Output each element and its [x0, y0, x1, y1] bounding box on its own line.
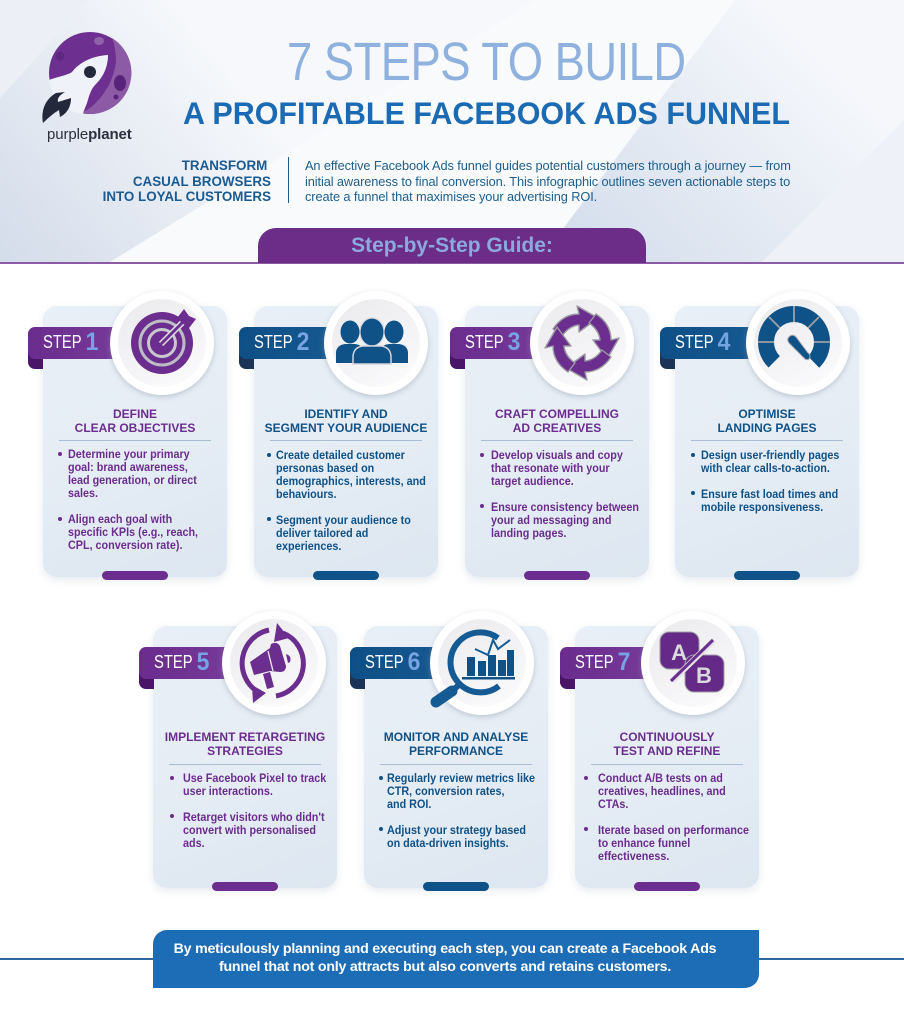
- step ribbon: [350, 647, 432, 689]
- panel: step 1: [28, 290, 228, 582]
- heading: IMPLEMENT RETARGETING STRATEGIES: [165, 730, 325, 758]
- heading: CONTINUOUSLY TEST AND REFINE: [614, 730, 720, 758]
- bullets: Use Facebook Pixel to track user interactions. Retarget visitors who didn't convert with personalised ads.: [183, 772, 326, 850]
- section tab: step-by-step guide: [258, 228, 646, 263]
- icon: planet and rocket: [42, 32, 132, 123]
- step ribbon: STEP: [43, 332, 81, 352]
- icon: cycle arrows: [528, 290, 636, 399]
- header background: [0, 0, 904, 262]
- panel: step 5: [139, 610, 338, 892]
- heading: IDENTIFY AND SEGMENT YOUR AUDIENCE: [265, 407, 427, 434]
- card body: [153, 626, 337, 888]
- bullets: Regularly review metrics like CTR, conversion rates, and ROI. Adjust your strategy based on data-driven insights.: [387, 772, 535, 850]
- title line 1: 7 STEPS TO BUILD: [287, 32, 686, 92]
- heading: OPTIMISE LANDING PAGES: [717, 407, 817, 434]
- panel: step 4: [660, 290, 860, 582]
- step ribbon: STEP: [675, 332, 713, 352]
- card body: [254, 306, 438, 577]
- panel: step 3: [450, 290, 650, 582]
- step ribbon: STEP: [254, 332, 292, 352]
- bullets: Design user-friendly pages with clear calls-to-action. Ensure fast load times and mobile responsiveness.: [701, 449, 839, 514]
- icon: gauge: [743, 290, 852, 399]
- step ribbon: 5: [196, 648, 209, 676]
- icon: A/B test: A: [671, 640, 687, 665]
- bottom tab: [734, 571, 800, 580]
- heading: MONITOR AND ANALYSE PERFORMANCE: [384, 730, 528, 758]
- step ribbon: [450, 327, 532, 369]
- icon: A/B test: [639, 610, 747, 719]
- step ribbon: [139, 647, 224, 689]
- panel: step 6: [350, 610, 550, 892]
- closing banner: [153, 930, 759, 988]
- step ribbon: STEP: [575, 652, 613, 672]
- bottom tab: [102, 571, 168, 580]
- icon: A/B test: B: [696, 663, 712, 688]
- icon: people: [321, 290, 430, 399]
- step ribbon: STEP: [365, 652, 403, 672]
- step ribbon: 2: [296, 328, 309, 356]
- title line 2: A PROFITABLE FACEBOOK ADS FUNNEL: [183, 95, 790, 131]
- logo wordmark: purpleplanet: [47, 126, 132, 143]
- panel: step 2: [239, 290, 440, 582]
- panel: step 7: [560, 610, 760, 892]
- divider line under header: [0, 262, 904, 264]
- icon: target: [108, 290, 216, 399]
- bottom tab: [524, 571, 590, 580]
- icon: magnifier and chart: [427, 610, 536, 719]
- step ribbon: [560, 647, 644, 689]
- bottom tab: [423, 882, 489, 891]
- intro text: An effective Facebook Ads funnel guides potential customers through a journey — from initial awareness to final conversion. This infographic outlines seven actionable steps to create a funnel that maximises your advertising ROI.: [305, 158, 791, 204]
- step ribbon: [239, 327, 326, 369]
- step ribbon: 1: [85, 328, 98, 356]
- bullets: Determine your primary goal: brand awareness, lead generation, or direct sales. Align each goal with specific KPIs (e.g., reach, CPL, conversion rate).: [68, 448, 198, 552]
- card body: [364, 626, 548, 888]
- step ribbon: 3: [507, 328, 520, 356]
- bottom tab: [313, 571, 379, 580]
- bullets: Conduct A/B tests on ad creatives, headlines, and CTAs. Iterate based on performance to enhance funnel effectiveness.: [598, 772, 749, 863]
- step ribbon: [660, 327, 748, 369]
- step ribbon: STEP: [154, 652, 192, 672]
- bottom tab: [634, 882, 700, 891]
- step ribbon: STEP: [465, 332, 503, 352]
- bullets: Develop visuals and copy that resonate with your target audience. Ensure consistency between your ad messaging and landing pages.: [491, 449, 639, 540]
- bullets: Create detailed customer personas based on demographics, interests, and behaviours. Segment your audience to deliver tailored ad experiences.: [276, 449, 426, 553]
- closing banner: By meticulously planning and executing each step, you can create a Facebook Ads funnel that not only attracts but also converts and retains customers.: [174, 941, 716, 974]
- logo: purpleplanet: [42, 32, 132, 143]
- card body: [575, 626, 759, 888]
- subheading: TRANSFORM CASUAL BROWSERS INTO LOYAL CUSTOMERS: [103, 158, 271, 204]
- bottom tab: [212, 882, 278, 891]
- step ribbon: 4: [717, 328, 730, 356]
- heading: DEFINE CLEAR OBJECTIVES: [75, 407, 195, 434]
- heading: CRAFT COMPELLING AD CREATIVES: [495, 407, 619, 434]
- icon: megaphone with arrows: [220, 610, 328, 719]
- card body: [43, 306, 227, 577]
- step ribbon: [28, 327, 112, 369]
- title: [183, 32, 790, 131]
- step ribbon: 6: [407, 648, 420, 676]
- section tab: step-by-step guide: Step-by-Step Guide:: [351, 234, 553, 257]
- card body: [675, 306, 859, 577]
- step ribbon: 7: [617, 648, 630, 676]
- card body: [465, 306, 649, 577]
